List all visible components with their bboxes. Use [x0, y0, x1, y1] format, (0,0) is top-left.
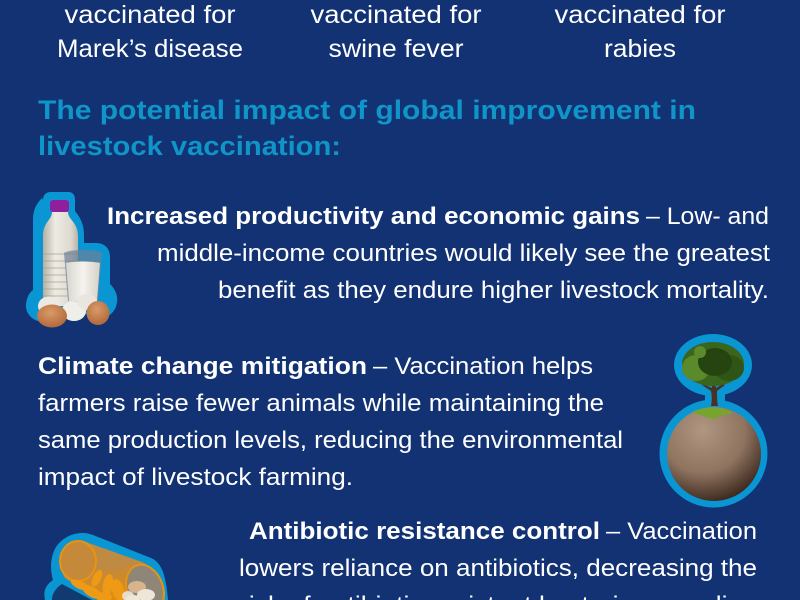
- pills inside: [69, 568, 127, 600]
- caption: Marek's disease: vaccinated for: [64, 1, 236, 29]
- open mouth with white tablets: [120, 559, 170, 600]
- text block: climate change mitigation: – Vaccination helps: [373, 353, 593, 380]
- icon: spilled pill bottle: [44, 533, 170, 600]
- caption: Marek's disease: [57, 1, 243, 63]
- text block: increased productivity: – Low- and: [646, 203, 769, 230]
- text block: increased productivity: [107, 203, 770, 304]
- heading: livestock vaccination:: [38, 131, 341, 161]
- text block: climate change mitigation: [38, 353, 623, 491]
- text block: increased productivity: Increased productivity and economic gains: [107, 203, 640, 230]
- brown eggs: [37, 304, 67, 328]
- caption: swine fever: [310, 1, 482, 63]
- text block: climate change mitigation: farmers raise fewer animals while maintaining the: [38, 390, 604, 417]
- text block: climate change mitigation: Climate change mitigation: [38, 353, 367, 380]
- caption: rabies: vaccinated for: [554, 1, 726, 29]
- caption: swine fever: vaccinated for: [310, 1, 482, 29]
- caption: Marek's disease: Marek’s disease: [57, 35, 243, 63]
- text block: climate change mitigation: same production levels, reducing the environmental: [38, 427, 623, 454]
- caption: rabies: rabies: [604, 35, 676, 63]
- text block: antibiotic resistance control: lowers reliance on antibiotics, decreasing the: [239, 555, 757, 582]
- cap: [50, 200, 69, 212]
- icon: milk bottle, glass and eggs: [26, 192, 117, 328]
- text block: antibiotic resistance control: [239, 518, 757, 600]
- top stat captions: [57, 1, 726, 63]
- glass of milk: [64, 250, 102, 301]
- text block: increased productivity: benefit as they endure higher livestock mortality.: [218, 277, 769, 304]
- text block: climate change mitigation: impact of livestock farming.: [38, 464, 353, 491]
- heading: The potential impact of global improvement in: [38, 95, 696, 125]
- text block: antibiotic resistance control: – Vaccination: [606, 518, 757, 545]
- white eggs: [38, 296, 60, 316]
- caption: swine fever: swine fever: [328, 35, 464, 63]
- grass: [692, 408, 733, 420]
- trunk and branches: [702, 378, 725, 406]
- icon: tree on a soil globe: [660, 334, 768, 508]
- soil globe: [667, 407, 761, 501]
- heading: [38, 95, 696, 161]
- text block: increased productivity: middle-income countries would likely see the greatest: [157, 240, 770, 267]
- caption: rabies: [554, 1, 726, 63]
- crown: [682, 342, 744, 386]
- text block: antibiotic resistance control: Antibiotic resistance control: [249, 518, 600, 545]
